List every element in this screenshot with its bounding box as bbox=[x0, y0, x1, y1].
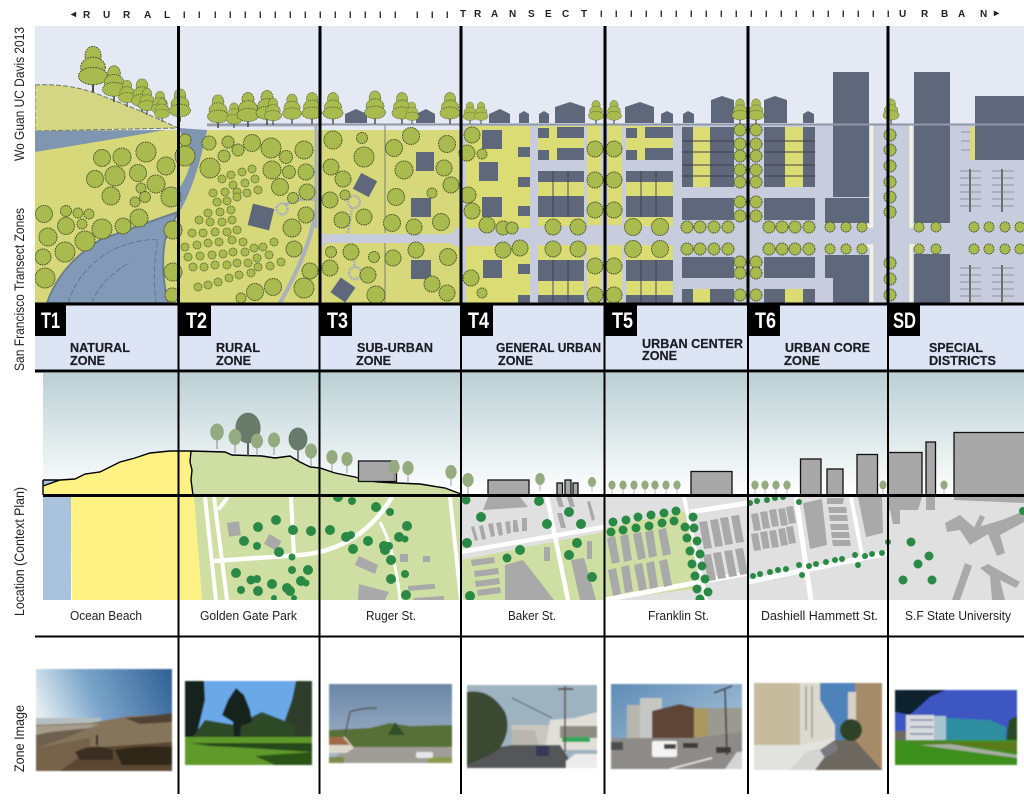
top scale: rural to urban transect: RURAL bbox=[83, 10, 170, 21]
road network bbox=[205, 497, 888, 600]
panel: context plan bbox=[43, 492, 1024, 604]
captions row: Ruger St. bbox=[366, 608, 416, 623]
captions row: S.F State University bbox=[905, 608, 1011, 623]
label: special districts: DISTRICTS bbox=[929, 354, 996, 368]
top scale: rural to urban transect bbox=[70, 8, 1000, 21]
river bbox=[180, 128, 207, 210]
plan trees: urban zones bbox=[459, 124, 1024, 303]
top scale: rural to urban transect: URBAN bbox=[899, 9, 987, 20]
photo: Ruger St. bbox=[329, 684, 452, 763]
building footprints bbox=[227, 497, 1024, 603]
photo: Ocean Beach bbox=[36, 669, 172, 771]
side label: location: Location (Context Plan) bbox=[11, 487, 27, 616]
photo: S.F State University bbox=[895, 690, 1017, 765]
captions row: Golden Gate Park bbox=[200, 608, 297, 623]
tag: T1 bbox=[35, 305, 66, 336]
panel: zone label band bbox=[35, 304, 1024, 371]
vertical zone dividers bbox=[178, 26, 888, 794]
plan trees: rural zone bbox=[175, 134, 318, 303]
label: urban core zone: ZONE bbox=[784, 354, 820, 368]
label: special districts: SPECIAL bbox=[929, 341, 983, 355]
hill on natural zone bbox=[35, 85, 178, 131]
photo: Franklin St. bbox=[611, 684, 742, 769]
tag: T3 bbox=[320, 305, 352, 336]
label: urban center zone: URBAN CENTER bbox=[642, 337, 743, 351]
label: urban center zone: ZONE bbox=[642, 349, 677, 363]
plan trees: natural zone bbox=[35, 142, 182, 302]
label: rural zone: ZONE bbox=[216, 354, 251, 368]
label: general urban zone bbox=[496, 341, 601, 368]
label: urban core zone: URBAN CORE bbox=[785, 341, 870, 355]
tag: SD: SD bbox=[893, 308, 916, 333]
block dividers bbox=[553, 141, 815, 303]
section trees bbox=[210, 413, 948, 494]
tag: SD bbox=[888, 305, 920, 336]
side label: zone image: Zone Image bbox=[11, 705, 27, 772]
tag: T5: T5 bbox=[612, 308, 633, 333]
label: sub-urban zone: SUB-URBAN bbox=[357, 341, 433, 355]
label: special districts bbox=[929, 341, 996, 368]
tag: T4 bbox=[461, 305, 493, 336]
top scale: rural to urban transect: ◂ bbox=[70, 9, 77, 20]
chart: terrain section bbox=[43, 451, 461, 495]
label: sub-urban zone: ZONE bbox=[356, 354, 391, 368]
rural roads bbox=[207, 125, 316, 303]
parking lots bbox=[960, 132, 1014, 302]
captions row: Franklin St. bbox=[648, 608, 709, 623]
tree dots bbox=[231, 492, 1024, 604]
top scale: rural to urban transect: IIIIIIIIIIIIIIIIIIII bbox=[600, 9, 890, 19]
label: natural zone: NATURAL bbox=[70, 341, 130, 355]
side label: San Francisco Transect Zones: San Francisco Transect Zones bbox=[11, 208, 27, 371]
tag: T6 bbox=[748, 305, 780, 336]
captions row: Ocean Beach bbox=[70, 608, 142, 623]
photo: Golden Gate Park bbox=[185, 681, 312, 765]
label: rural zone: RURAL bbox=[216, 341, 260, 355]
label: urban core zone bbox=[784, 341, 870, 368]
photo: Baker St. bbox=[467, 685, 597, 768]
label: natural zone: ZONE bbox=[70, 354, 105, 368]
tag: T2 bbox=[179, 305, 211, 336]
horizon line bbox=[207, 124, 1024, 126]
section buildings bbox=[358, 432, 1024, 495]
tag: T2: T2 bbox=[186, 308, 207, 333]
tag: T1: T1 bbox=[41, 308, 60, 333]
driveway loops bbox=[348, 196, 361, 279]
label: general urban zone: GENERAL URBAN bbox=[496, 341, 601, 355]
urban road base bbox=[461, 125, 1024, 303]
skyline houses bbox=[345, 96, 814, 123]
skyline trees bbox=[78, 46, 899, 128]
captions row: Baker St. bbox=[508, 608, 556, 623]
panel: transect plan and skyline bbox=[35, 26, 1024, 304]
label: sub-urban zone bbox=[356, 341, 433, 368]
label: general urban zone: ZONE bbox=[498, 354, 533, 368]
tag: T6: T6 bbox=[755, 308, 776, 333]
white sidewalk strips bbox=[862, 125, 920, 303]
lake bbox=[47, 212, 178, 303]
side label: credit: Wo Guan UC Davis 2013 bbox=[11, 27, 27, 161]
photo: Dashiell Hammett St. bbox=[754, 683, 882, 770]
suburban lot lines bbox=[384, 126, 386, 302]
label: urban center zone bbox=[642, 337, 743, 363]
tag: T5 bbox=[605, 305, 637, 336]
plan trees: rural orchard bbox=[181, 165, 285, 291]
top scale: rural to urban transect: IIIIIIIIIIIIIIIIII bbox=[183, 10, 449, 20]
suburban road bbox=[322, 226, 460, 248]
panel: cross-section sky bbox=[43, 373, 1024, 495]
rural and suburban houses bbox=[248, 152, 434, 303]
land base bbox=[35, 130, 461, 303]
captions row: Dashiell Hammett St. bbox=[761, 608, 878, 623]
top scale: rural to urban transect: TRANSECT bbox=[460, 9, 587, 20]
plan trees: suburban zone bbox=[322, 128, 459, 304]
T4 lots bbox=[466, 125, 975, 303]
horizontal dividers bbox=[35, 496, 1024, 636]
label: natural zone bbox=[70, 341, 130, 368]
captions row bbox=[70, 608, 1011, 623]
tag: T4: T4 bbox=[468, 308, 490, 333]
label: rural zone bbox=[216, 341, 260, 368]
urban center green block bbox=[605, 510, 703, 600]
tag: T3: T3 bbox=[327, 308, 348, 333]
blocks and buildings bbox=[479, 72, 1024, 303]
general urban green patches bbox=[461, 532, 604, 600]
top scale: rural to urban transect: ▸ bbox=[993, 8, 1000, 19]
water inlet bbox=[35, 130, 165, 152]
